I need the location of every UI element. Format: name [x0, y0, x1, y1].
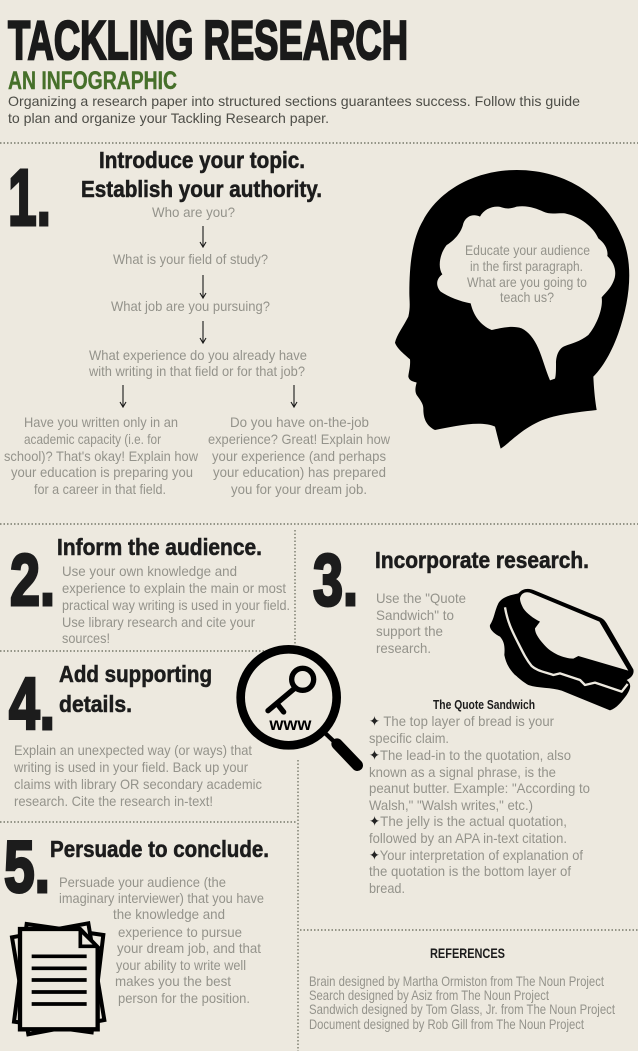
- heading: section 1: Introduce your topic.: [99, 147, 305, 173]
- intro text: [8, 93, 580, 126]
- body: section 5: Persuade your audience (the: [59, 874, 226, 890]
- body: section 5: imaginary interviewer) that you have: [59, 890, 264, 906]
- right branch text: your education) has prepared: [213, 464, 386, 480]
- quote sandwich text: followed by an APA in-text citation.: [369, 830, 567, 846]
- quote sandwich title: The Quote Sandwich: [433, 697, 535, 712]
- right branch text: Do you have on-the-job: [230, 414, 369, 430]
- heading: section 3: Incorporate research.: [375, 547, 589, 573]
- heading: section 4: details.: [59, 691, 132, 717]
- panel: section 1: [4, 147, 629, 497]
- right branch text: [208, 414, 391, 497]
- number 5: 5.: [4, 827, 50, 908]
- question flow: What is your field of study?: [113, 251, 268, 267]
- body: section 5: your dream job, and that: [117, 940, 261, 956]
- icon: sandwich: [490, 589, 634, 710]
- body: section 4: [13, 742, 262, 809]
- body: section 4: claims with library OR secondary academic: [14, 776, 262, 792]
- body: section 2: Use your own knowledge and: [62, 563, 237, 579]
- icon: document stack: [12, 923, 104, 1034]
- question flow: What experience do you already have: [89, 347, 307, 363]
- quote sandwich text: ✦The lead-in to the quotation, also: [369, 747, 571, 763]
- quote sandwich text: ✦The jelly is the actual quotation,: [369, 813, 567, 829]
- panel: section 4: [9, 661, 262, 809]
- subtitle: AN INFOGRAPHIC: [8, 67, 177, 95]
- quote sandwich text: [369, 713, 590, 896]
- number 3: 3.: [313, 540, 358, 621]
- left branch text: your education is preparing you: [11, 464, 193, 480]
- number 2: 2.: [10, 540, 55, 621]
- quote sandwich text: peanut butter. Example: "According to: [369, 780, 590, 796]
- right branch text: you for your dream job.: [231, 481, 367, 497]
- icon: magnifying glass with key: www: [268, 714, 312, 734]
- body: section 4: research. Cite the research in-text!: [14, 793, 213, 809]
- panel: section 3: [313, 540, 634, 896]
- left branch text: Have you written only in an: [24, 414, 178, 430]
- quote sandwich text: the quotation is the bottom layer of: [369, 863, 571, 879]
- intro text: Organizing a research paper into structured sections guarantees success. Follow this guide: [8, 93, 580, 109]
- question flow: with writing in that field or for that job?: [88, 363, 305, 379]
- panel: section 2: [10, 534, 290, 646]
- left branch text: for a career in that field.: [34, 481, 166, 497]
- body: section 2: sources!: [62, 630, 110, 646]
- body: section 4: writing is used in your field. Back up your: [13, 759, 248, 775]
- body: section 3: support the: [376, 623, 443, 639]
- body: section 2: Use library research and cite your: [62, 614, 255, 630]
- quote sandwich text: Walsh," "Walsh writes," etc.): [369, 797, 533, 813]
- body: section 5: the knowledge and: [113, 906, 225, 922]
- body: section 5: [59, 874, 264, 1006]
- body: section 3: Use the "Quote: [376, 590, 466, 606]
- quote sandwich text: bread.: [369, 880, 405, 896]
- left branch text: academic capacity (i.e. for: [24, 431, 161, 447]
- body: section 5: makes you the best: [115, 973, 231, 989]
- heading: section 1: [81, 147, 322, 202]
- title: TACKLING RESEARCH: [8, 9, 408, 71]
- body: section 5: person for the position.: [118, 990, 250, 1006]
- heading: section 2: Inform the audience.: [57, 534, 262, 560]
- body: section 2: [62, 563, 290, 646]
- number 4: 4.: [9, 664, 55, 745]
- right branch text: experience? Great! Explain how: [208, 431, 391, 447]
- heading: section 4: Add supporting: [59, 661, 212, 687]
- body: section 3: research.: [376, 640, 431, 656]
- brain text: Educate your audience: [465, 242, 590, 258]
- brain text: in the first paragraph.: [470, 258, 583, 274]
- panel: section 5: [4, 827, 269, 1034]
- quote sandwich text: ✦Your interpretation of explanation of: [369, 847, 583, 863]
- body: section 5: your ability to write well: [116, 957, 246, 973]
- references list: Search designed by Asiz from The Noun Project: [309, 987, 549, 1003]
- flow arrows: [120, 226, 297, 407]
- icon: head with brain: [395, 170, 629, 449]
- left branch text: [4, 414, 199, 497]
- body: section 2: experience to explain the main or most: [62, 580, 286, 596]
- question flow: [88, 204, 307, 379]
- quote sandwich text: ✦ The top layer of bread is your: [369, 713, 554, 729]
- brain text: teach us?: [500, 289, 554, 305]
- question flow: Who are you?: [152, 204, 235, 220]
- brain text: [465, 242, 590, 305]
- right branch text: your experience (and perhaps: [212, 448, 386, 464]
- question flow: What job are you pursuing?: [111, 298, 270, 314]
- heading: section 4: [59, 661, 212, 717]
- references heading: REFERENCES: [430, 945, 505, 961]
- body: section 2: practical way writing is used in your field.: [62, 597, 290, 613]
- quote sandwich text: known as a signal phrase, is the: [369, 764, 556, 780]
- heading: section 5: Persuade to conclude.: [50, 836, 269, 862]
- body: section 4: Explain an unexpected way (or ways) that: [14, 742, 252, 758]
- panel: references: [309, 945, 615, 1032]
- icon: magnifying glass with key: [241, 649, 357, 765]
- brain text: What are you going to: [467, 274, 587, 290]
- body: section 5: experience to pursue: [118, 924, 242, 940]
- left branch text: school)? That's okay! Explain how: [4, 448, 199, 464]
- references list: [309, 973, 615, 1032]
- number 1: 1.: [8, 153, 51, 242]
- quote sandwich text: specific claim.: [369, 730, 449, 746]
- intro text: to plan and organize your Tackling Research paper.: [8, 110, 329, 126]
- body: section 3: Sandwich" to: [376, 607, 454, 623]
- body: section 3: [376, 590, 466, 656]
- heading: section 1: Establish your authority.: [81, 176, 322, 202]
